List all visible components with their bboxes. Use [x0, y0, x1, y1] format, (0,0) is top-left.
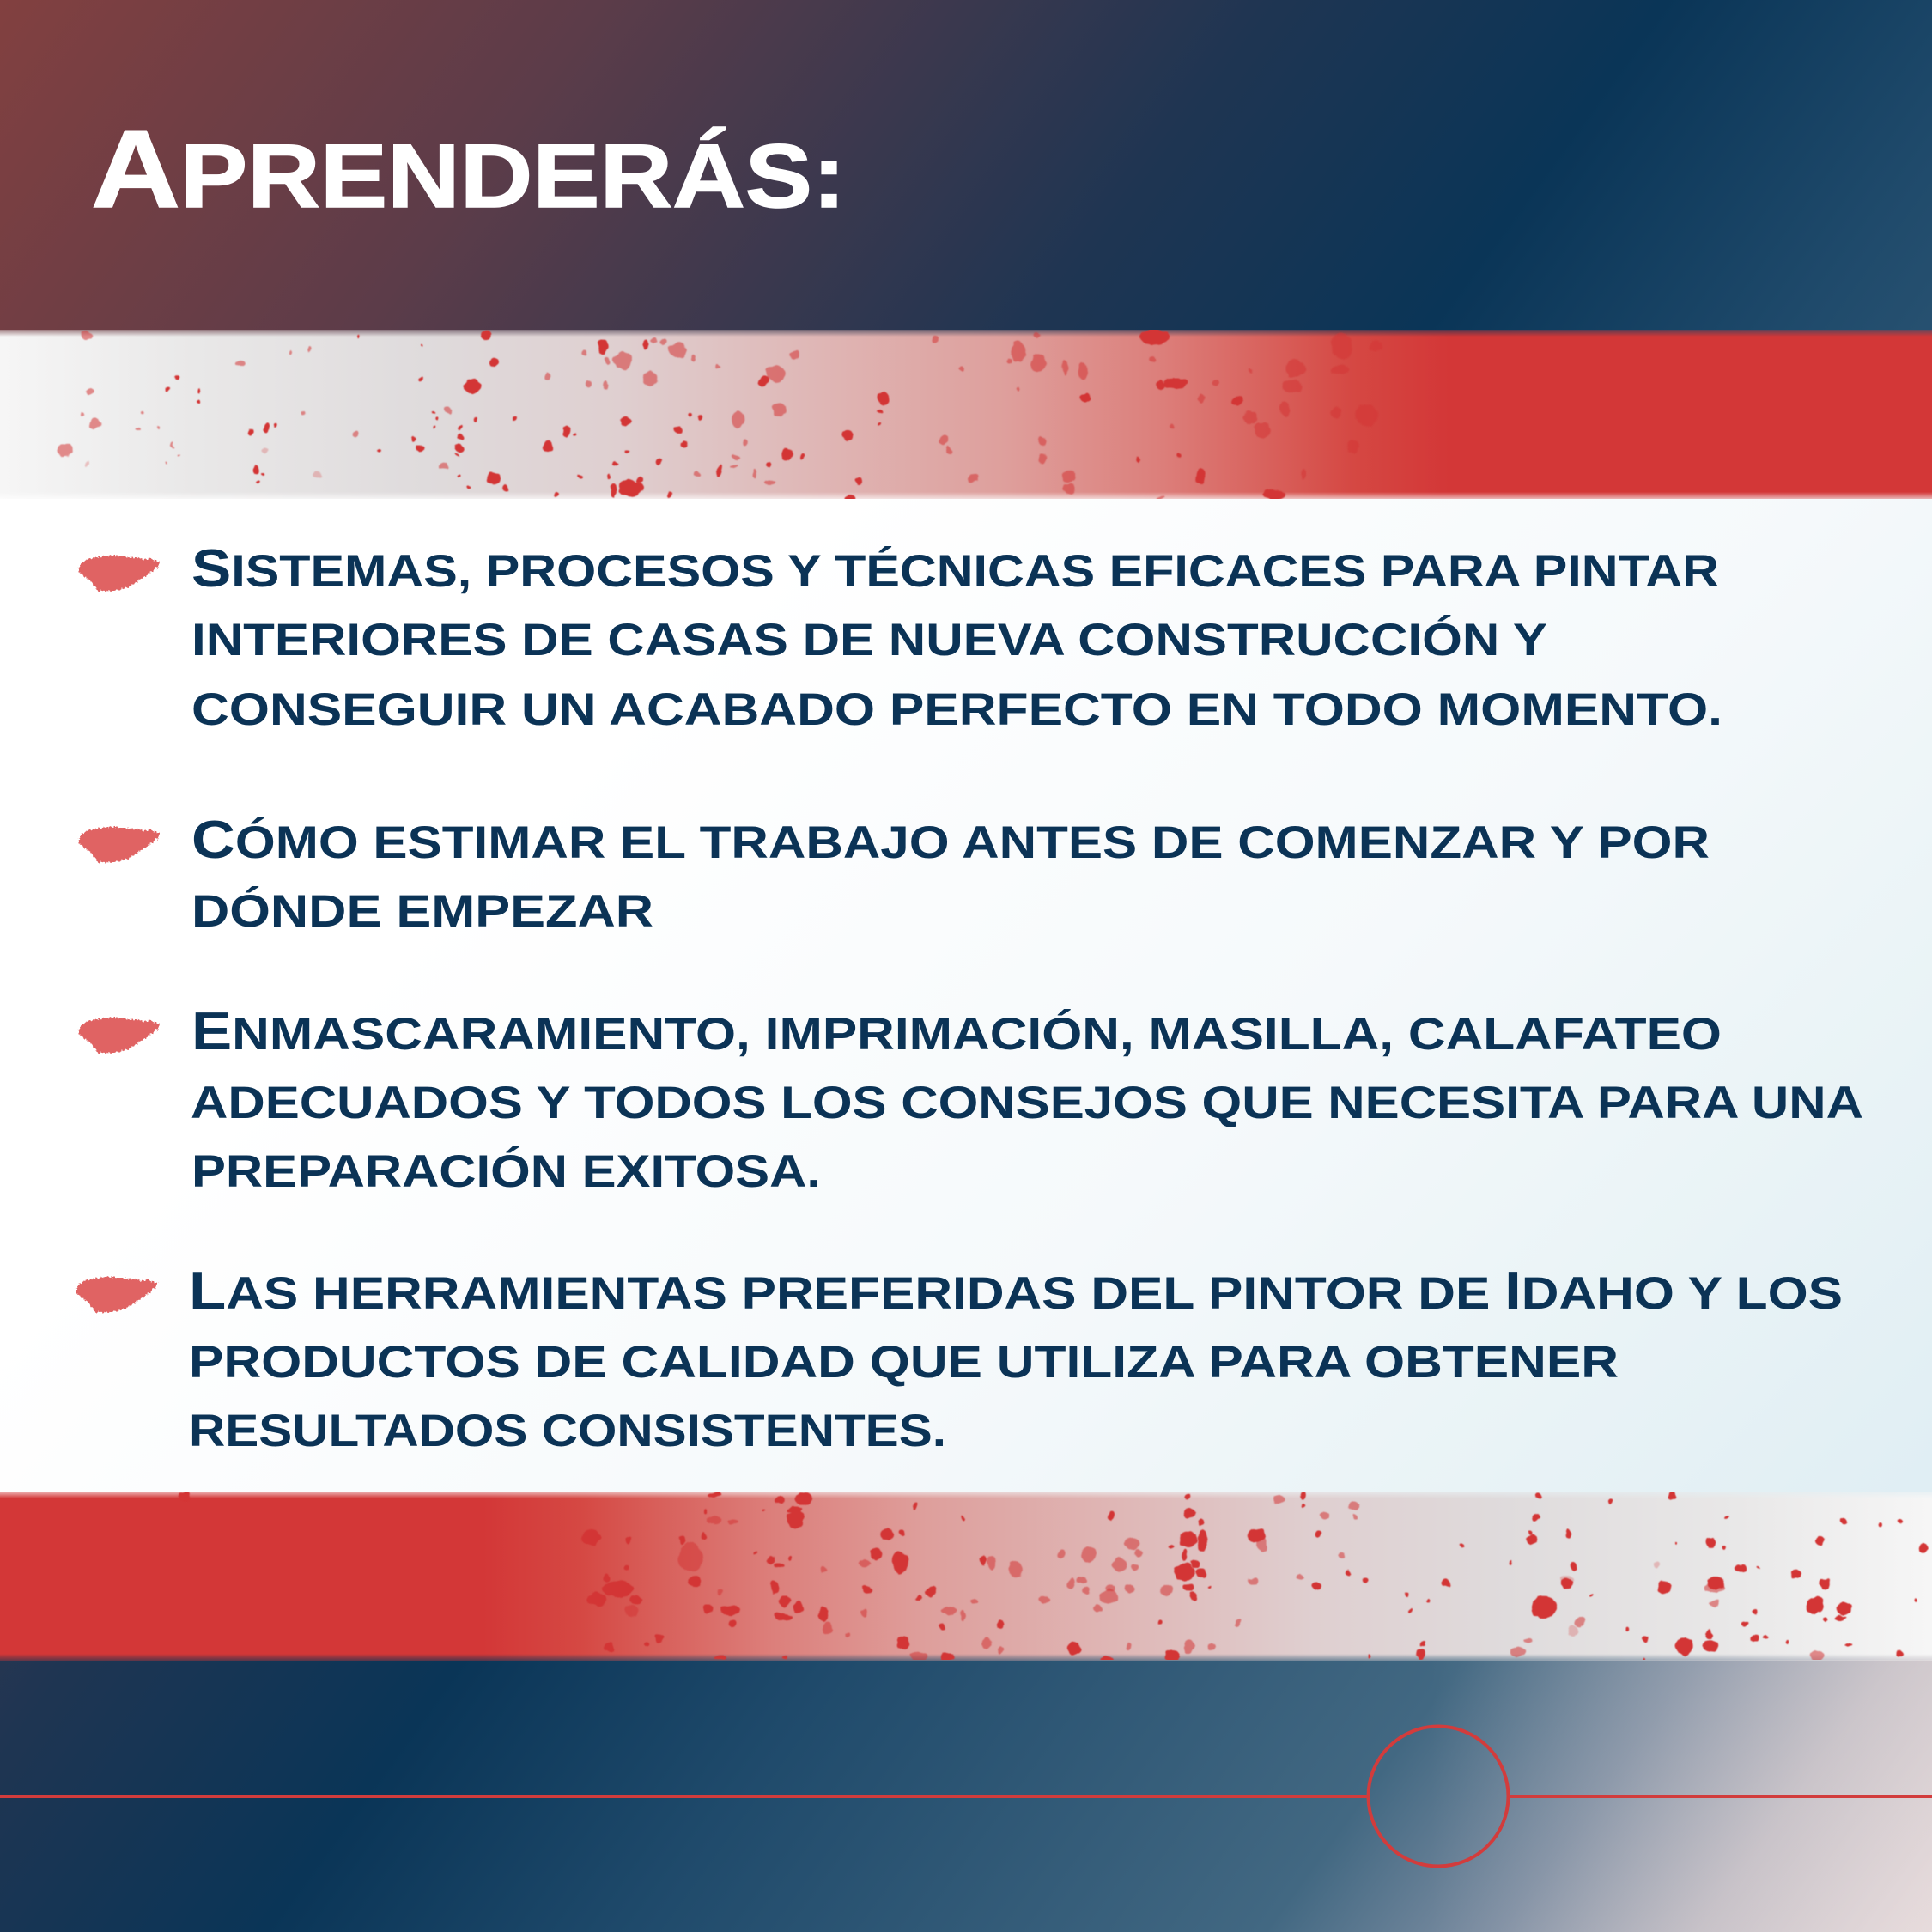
text block: item 3: PREPARACIÓN EXITOSA.: [191, 1145, 821, 1197]
top red paint splatter: [58, 330, 1382, 501]
text block: item 1: [191, 539, 1722, 735]
text block: item 2: [191, 811, 1710, 937]
text block: item 3: [191, 1002, 1863, 1197]
text block: item 2: DÓNDE EMPEZAR: [191, 885, 653, 937]
item 2: [79, 811, 1710, 937]
text block: item 3: ENMASCARAMIENTO, IMPRIMACIÓN, MASILLA, CALAFATEO: [191, 1002, 1722, 1061]
top paint band: [0, 330, 1932, 499]
icon: paint brush stroke bullet: [79, 1018, 161, 1053]
text block: item 3: ADECUADOS Y TODOS LOS CONSEJOS QUE NECESITA PARA UNA: [191, 1078, 1863, 1128]
text block: item 1: CONSEGUIR UN ACABADO PERFECTO EN TODO MOMENTO.: [191, 684, 1722, 735]
panel: content background: [0, 414, 1932, 1575]
bottom right light glow: [0, 1660, 1932, 1932]
text block: item 4: LAS HERRAMIENTAS PREFERIDAS DEL PINTOR DE IDAHO Y LOS: [189, 1261, 1843, 1321]
item 1: [79, 539, 1722, 735]
text block: item 1: INTERIORES DE CASAS DE NUEVA CONSTRUCCIÓN Y: [191, 614, 1547, 665]
bottom red paint splatter: [179, 1492, 1929, 1662]
icon: paint brush stroke bullet: [79, 827, 161, 862]
text block: item 4: RESULTADOS CONSISTENTES.: [189, 1406, 946, 1456]
text block: item 2: CÓMO ESTIMAR EL TRABAJO ANTES DE COMENZAR Y POR: [191, 811, 1710, 870]
text block: item 1: SISTEMAS, PROCESOS Y TÉCNICAS EFICACES PARA PINTAR: [191, 539, 1719, 598]
icon: paint brush stroke bullet: [76, 1277, 158, 1312]
text block: item 4: [189, 1261, 1843, 1456]
icon: paint brush stroke bullet: [79, 556, 161, 591]
item 3: [79, 1002, 1863, 1197]
bottom paint band: [0, 1492, 1932, 1661]
item 4: [76, 1261, 1843, 1456]
text block: item 4: PRODUCTOS DE CALIDAD QUE UTILIZA PARA OBTENER: [189, 1337, 1619, 1388]
title: APRENDERÁS:: [91, 107, 846, 231]
decorative circle and line: [0, 1726, 1932, 1867]
